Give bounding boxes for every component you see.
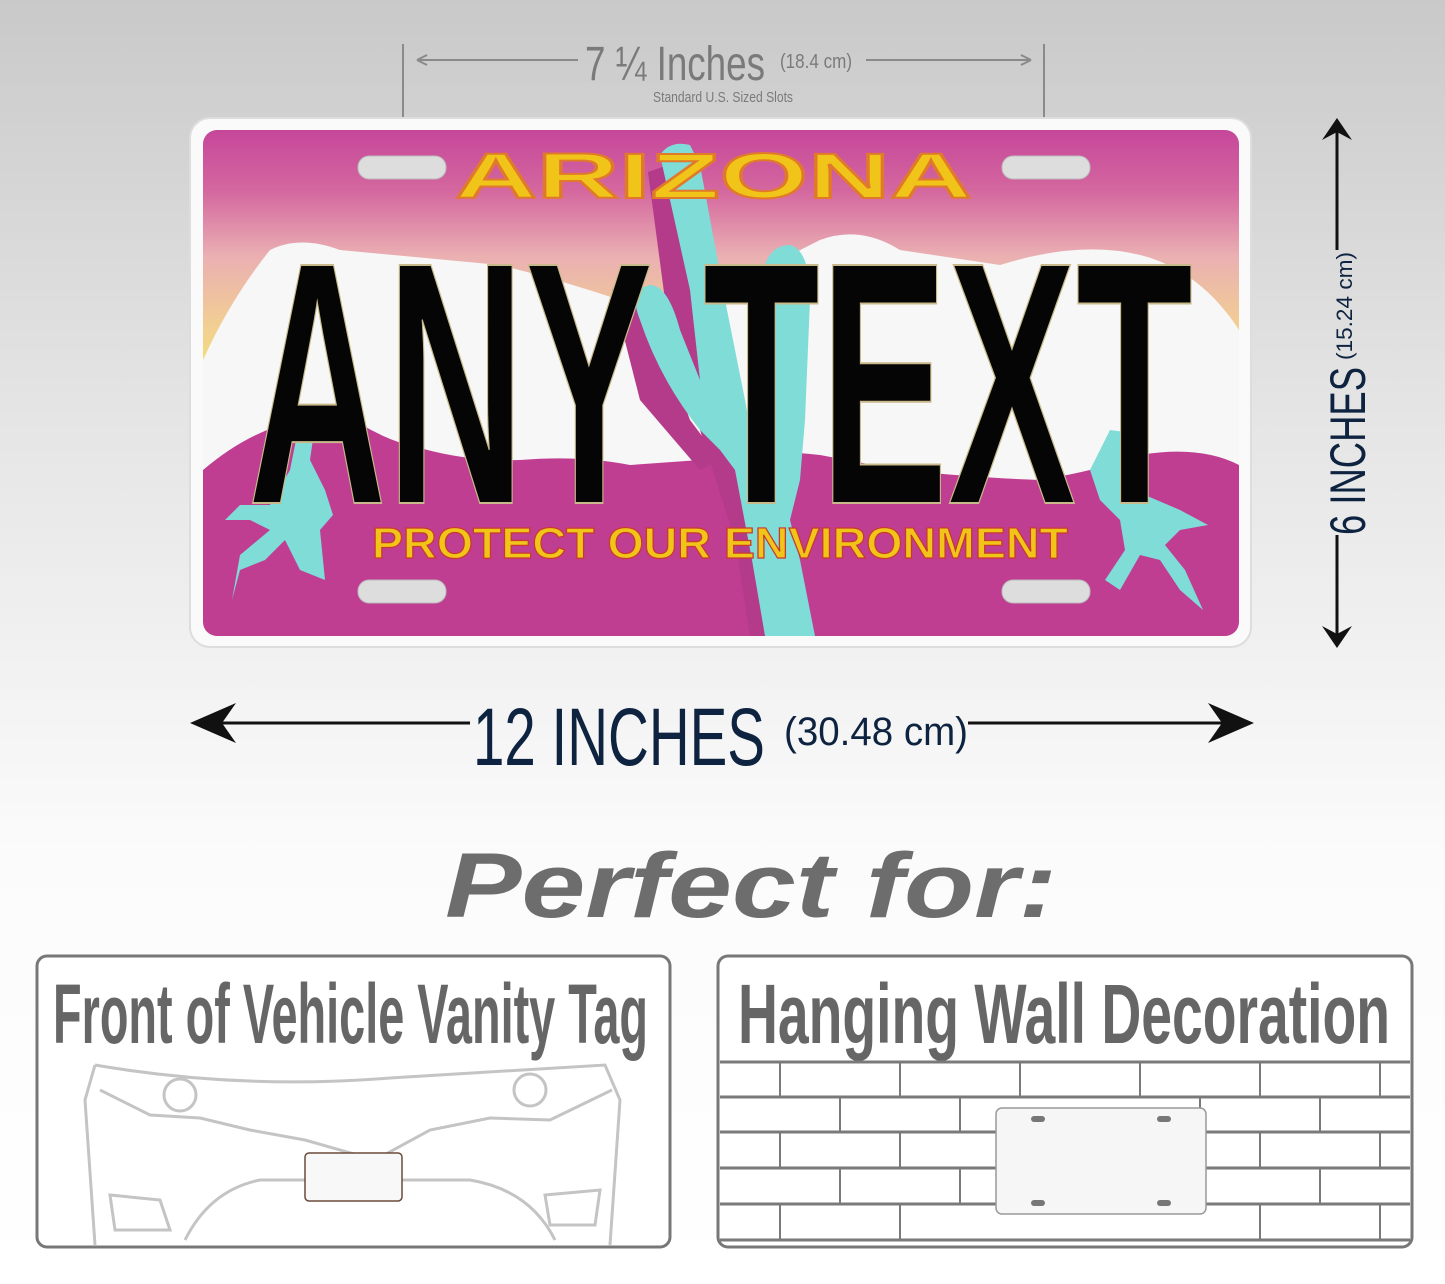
width dimension: (30.48 cm)	[784, 710, 968, 754]
top dimension: slot spacing	[403, 38, 1044, 176]
panel: hanging wall decoration	[718, 956, 1412, 1247]
panel: front of vehicle	[37, 956, 670, 1247]
icon: cactus	[612, 144, 815, 636]
heading: Perfect for: Perfect for:	[445, 835, 1057, 937]
car drawing	[85, 1065, 620, 1245]
PROTECT OUR ENVIRONMENT: PROTECT OUR ENVIRONMENT	[372, 519, 1068, 568]
icon: lizard right	[1090, 430, 1208, 610]
ARIZONA: ARIZONA	[455, 140, 972, 212]
height dimension	[1320, 118, 1376, 648]
height dimension: 6 INCHES	[1320, 367, 1376, 535]
slots	[358, 156, 446, 179]
height dimension: (15.24 cm)	[1332, 252, 1357, 360]
top dimension: slot spacing: 7 ¼ Inches	[585, 38, 765, 91]
brick wall	[720, 1062, 1410, 1240]
width dimension	[190, 692, 1254, 783]
wall plate	[996, 1108, 1206, 1214]
width dimension: 12 INCHES	[473, 692, 765, 783]
top dimension: slot spacing: Standard U.S. Sized Slots	[653, 89, 793, 106]
title: Front of Vehicle Vanity Tag	[53, 967, 648, 1061]
small plate	[305, 1153, 402, 1201]
icon: lizard left	[225, 420, 333, 600]
top dimension: slot spacing: (18.4 cm)	[780, 51, 852, 73]
license plate	[190, 118, 1251, 647]
